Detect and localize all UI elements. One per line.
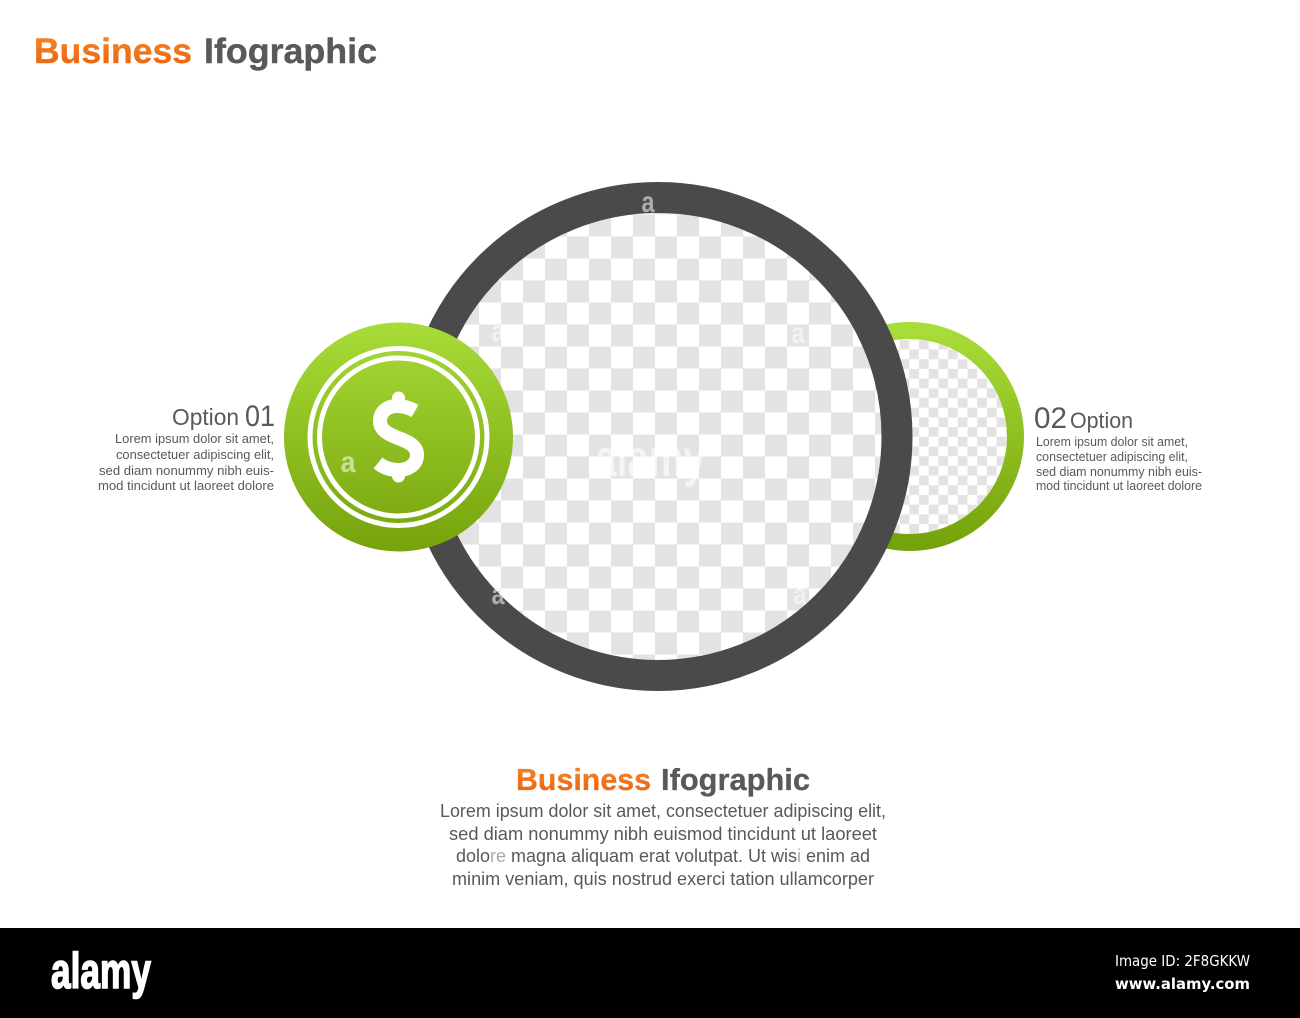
text block: option 02: Lorem ipsum dolor sit amet, (1036, 435, 1188, 449)
text block: option 02: sed diam nonummy nibh euis- (1036, 465, 1202, 479)
text block: bottom paragraph: dolore magna aliquam erat volutpat. Ut wisi enim ad (456, 846, 870, 866)
panel: option 02 circle (804, 330, 1016, 542)
text block: option 01: Lorem ipsum dolor sit amet, (115, 432, 274, 446)
panel: large photo circle: alamy (595, 430, 705, 488)
panel: large photo circle (419, 186, 897, 676)
heading: bottom: Ifographic (661, 763, 810, 797)
text block: option 01: sed diam nonummy nibh euis- (99, 464, 274, 478)
text block: option 01: mod tincidunt ut laoreet dolore (98, 479, 274, 493)
title: Ifographic (204, 31, 377, 71)
icon: green dollar coin: a (340, 446, 356, 479)
panel: large photo circle: a (792, 317, 805, 350)
panel: large photo circle: a (642, 186, 655, 219)
text block: option 02: Option (1070, 408, 1133, 433)
text block: bottom paragraph (440, 801, 886, 889)
heading: bottom: Business (516, 763, 651, 797)
panel: large photo circle: a (492, 315, 505, 348)
icon: dollar symbol (378, 398, 417, 476)
text block: bottom paragraph: Lorem ipsum dolor sit amet, consectetuer adipiscing elit, (440, 801, 886, 821)
heading: bottom (516, 763, 810, 797)
footer bar (0, 928, 1300, 1018)
panel: large photo circle: a (492, 578, 505, 611)
title: Business (34, 31, 192, 71)
panel: large photo circle: a (794, 578, 807, 611)
text block: option 01: consectetuer adipiscing elit, (116, 448, 274, 462)
text block: option 01: 01 (245, 400, 275, 433)
text block: option 02 (1034, 402, 1202, 493)
title (34, 31, 377, 71)
footer logo: alamy (51, 943, 151, 999)
footer url: www.alamy.com (1115, 975, 1250, 993)
text block: bottom paragraph: sed diam nonummy nibh euismod tincidunt ut laoreet (449, 824, 877, 844)
icon: green dollar coin (284, 322, 513, 552)
footer image id: Image ID: 2F8GKKW (1115, 952, 1250, 970)
text block: option 02: consectetuer adipiscing elit, (1036, 450, 1188, 464)
text block: bottom paragraph: minim veniam, quis nostrud exerci tation ullamcorper (452, 869, 874, 889)
text block: option 01: Option (172, 404, 239, 430)
text block: option 01 (98, 400, 275, 493)
text block: option 02: mod tincidunt ut laoreet dolore (1036, 479, 1202, 493)
text block: option 02: 02 (1034, 402, 1067, 435)
